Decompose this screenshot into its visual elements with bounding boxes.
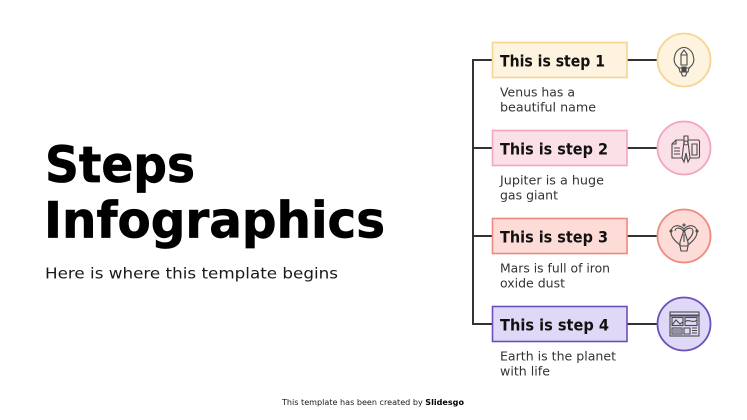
step 4 connector <box>627 323 657 325</box>
step 2 heading: This is step 2 <box>500 140 608 158</box>
step 3 icon circle <box>658 210 710 262</box>
step 4 description <box>500 349 616 379</box>
step 1 description: beautiful name <box>500 100 596 115</box>
icon: heart curve with pen nib <box>670 224 698 251</box>
step 2 connector <box>627 147 657 149</box>
icon: web layout window <box>670 312 699 336</box>
step 1 box <box>492 42 627 78</box>
step 3 description: Mars is full of iron <box>500 261 610 276</box>
step 4 heading: This is step 4 <box>500 316 609 334</box>
step 1 description <box>500 85 596 115</box>
step 2 description: gas giant <box>500 188 558 203</box>
step 4 <box>492 298 710 379</box>
step 3 description: oxide dust <box>500 276 565 291</box>
step 3 connector <box>627 235 657 237</box>
step 2 box <box>492 130 627 166</box>
step 1 heading: This is step 1 <box>500 52 605 70</box>
step 3 description <box>500 261 610 291</box>
title: Steps <box>45 136 195 194</box>
subtitle: Here is where this template begins <box>45 264 338 282</box>
step 4 description: Earth is the planet <box>500 349 616 364</box>
step 2 description <box>499 173 604 203</box>
title <box>44 136 385 250</box>
step 4 box <box>492 306 627 342</box>
step 1 <box>492 34 710 115</box>
step 3 <box>492 210 710 291</box>
step 1 description: Venus has a <box>500 85 575 100</box>
connector: vertical spine with branches <box>473 60 492 324</box>
icon: light bulb with pencil <box>674 48 694 76</box>
title: Infographics <box>44 192 385 250</box>
step 1 icon circle <box>658 34 710 86</box>
footer credit: This template has been created by Slidesgo <box>281 398 464 407</box>
step 2 description: Jupiter is a huge <box>499 173 604 188</box>
step 3 heading: This is step 3 <box>500 228 608 246</box>
icon: blueprint with compass <box>672 136 700 162</box>
step 2 <box>492 122 710 203</box>
step 4 icon circle <box>658 298 710 350</box>
step 4 description: with life <box>500 364 550 379</box>
step 3 box <box>492 218 627 254</box>
step 1 connector <box>627 59 657 61</box>
step 2 icon circle <box>658 122 710 174</box>
